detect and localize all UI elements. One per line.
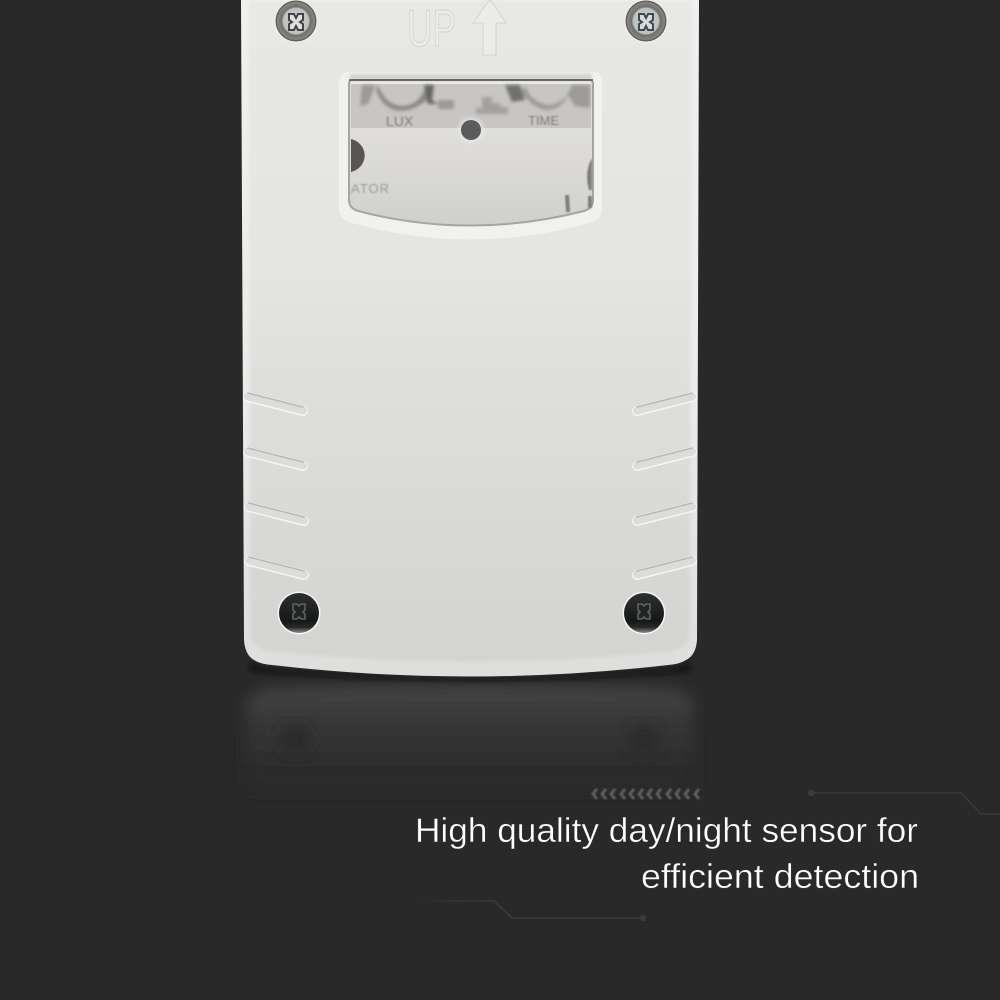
- window label: LUX: LUX: [386, 113, 414, 129]
- window upper band: [351, 84, 591, 128]
- embossed up arrow: [473, 0, 506, 55]
- caption: [415, 812, 919, 896]
- housing outer rim: [241, 0, 699, 676]
- circuit line: bottom left: [420, 901, 646, 920]
- right grooves: [637, 393, 692, 575]
- window left dark circle: [351, 139, 365, 172]
- caption line 2: efficient detection: [641, 858, 919, 896]
- sensor window: [339, 72, 602, 240]
- left grooves: [248, 393, 304, 575]
- circuit line: top right: [808, 790, 1000, 814]
- screw: bottom right: [622, 592, 666, 634]
- chevron row decoration: [593, 789, 699, 799]
- caption line 1: High quality day/night sensor for: [415, 812, 918, 850]
- housing face: [249, 0, 692, 662]
- screw: top right: [624, 0, 668, 43]
- window centre dot: [458, 117, 484, 143]
- window dial shadows: [360, 85, 590, 114]
- device contact shadow: [250, 662, 690, 681]
- window label: TIME: TIME: [528, 113, 559, 128]
- bezel top shadow: [350, 74, 592, 80]
- window bezel: [339, 72, 602, 240]
- screw: top left: [274, 0, 318, 43]
- window frame highlights: [349, 79, 593, 81]
- screw: bottom left: [278, 592, 320, 634]
- sensor housing: [241, 0, 699, 676]
- window glass: [349, 80, 593, 226]
- embossed UP label: UP: [407, 0, 456, 58]
- window right marks: [565, 158, 592, 212]
- window label: ATOR: ATOR: [351, 181, 389, 196]
- device reflection: [246, 684, 694, 790]
